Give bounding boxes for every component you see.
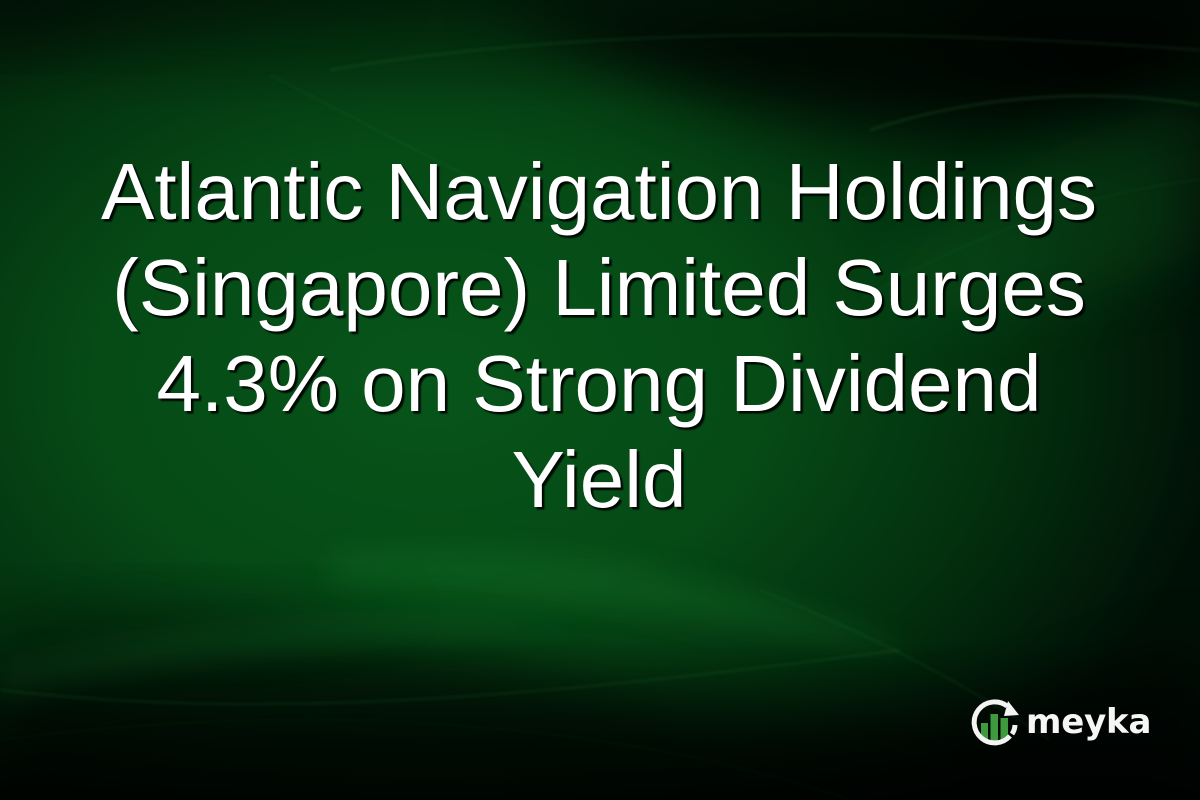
logo: meyka <box>972 699 1151 746</box>
icon: circular arrow with bars <box>972 699 1019 746</box>
lower dark sweep <box>0 632 1200 800</box>
wordmark: meyka <box>1026 702 1151 742</box>
lower light bands <box>330 549 920 655</box>
right side band <box>870 100 1200 312</box>
edges <box>0 0 1200 110</box>
title: Atlantic Navigation Holdings (Singapore) Limited Surges 4.3% on Strong Dividend Yield <box>101 147 1097 524</box>
top right dark sweep <box>480 0 1200 133</box>
